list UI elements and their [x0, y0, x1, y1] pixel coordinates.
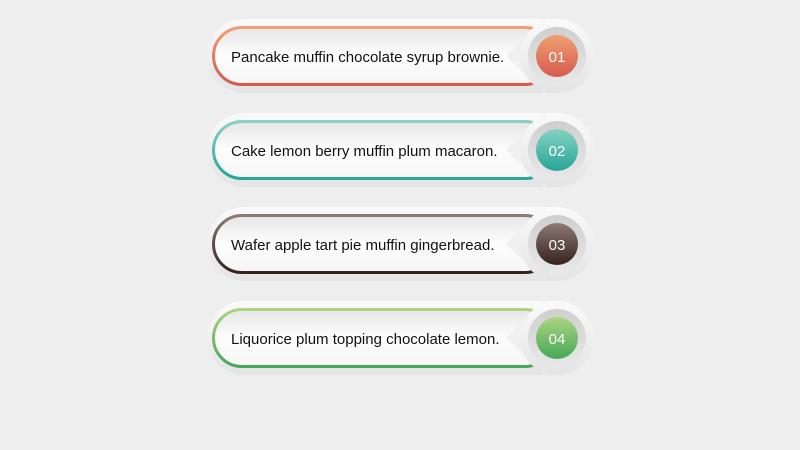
item 01: 01: [549, 49, 565, 66]
item 03: [207, 207, 594, 281]
item 04: [207, 301, 594, 375]
item 04: Liquorice plum topping chocolate lemon.: [231, 331, 500, 348]
item 04: 04: [549, 331, 565, 348]
item 02: Cake lemon berry muffin plum macaron.: [231, 143, 498, 160]
item 01: Pancake muffin chocolate syrup brownie.: [231, 49, 504, 66]
item 02: 02: [549, 143, 565, 160]
item 03: 03: [549, 237, 565, 254]
item 02: [207, 113, 594, 187]
item 03: Wafer apple tart pie muffin gingerbread.: [231, 237, 494, 254]
item 01: [207, 19, 594, 93]
